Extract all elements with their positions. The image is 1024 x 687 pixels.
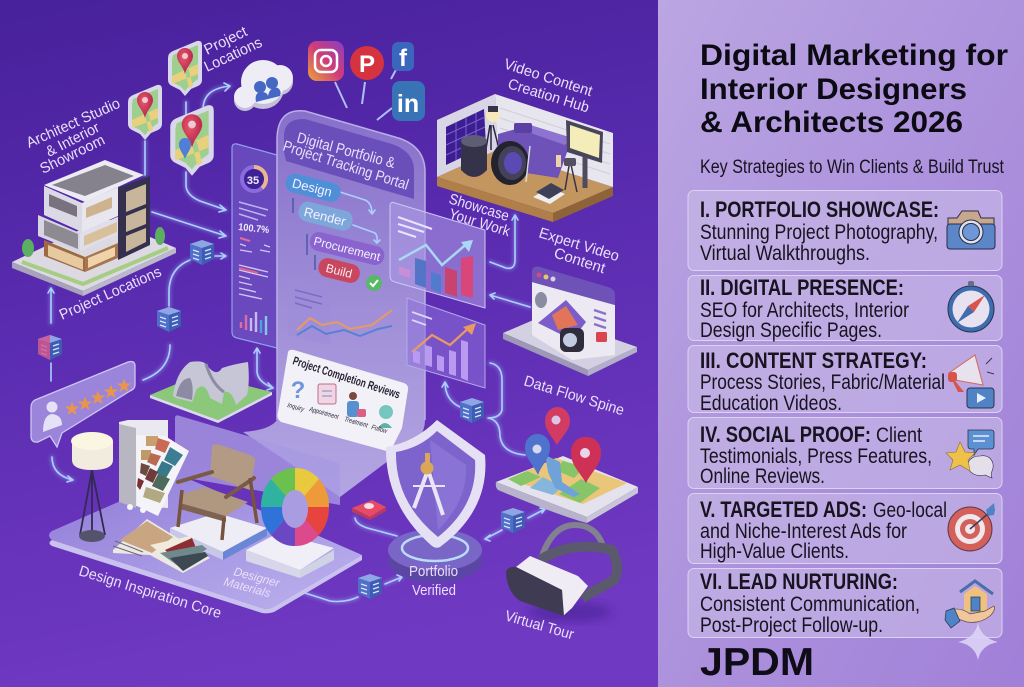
card 5: targeted ads: High-Value Clients. (700, 540, 849, 563)
icon: architect studio building (12, 160, 176, 296)
chart: donut (242, 167, 266, 191)
card 6: lead nurturing: VI. LEAD NURTURING: (700, 569, 898, 594)
icon: books (533, 183, 565, 204)
icon: sparkle (958, 623, 998, 660)
icon: star and chat bubbles (946, 430, 994, 478)
icon: material book (113, 519, 210, 573)
label: virtual tour: Virtual Tour (503, 608, 576, 643)
icon: compass tool (413, 453, 445, 515)
icon: pink pin (545, 407, 570, 445)
plinth: colour wheel (246, 533, 334, 578)
icon: blue pin on card (179, 138, 191, 159)
pill: build: Build (324, 261, 354, 281)
label: designer materials: Designer (232, 564, 282, 590)
icon: map with pins (496, 407, 638, 523)
step labels (286, 402, 388, 436)
icon: map pin cards (128, 41, 214, 176)
icon: spot light (485, 106, 500, 155)
icon: follow (378, 405, 393, 428)
step labels: Inquiry (286, 402, 305, 414)
label: project locations lower: Project Locations (57, 263, 164, 324)
label: data flow spine: Data Flow Spine (522, 373, 626, 419)
icon: pinterest: P (359, 51, 375, 78)
icon: user (43, 402, 62, 432)
icon: expert video browser (503, 267, 637, 376)
label: showcase your work: Your Work (447, 206, 512, 240)
chart panel: showcase bars (390, 202, 485, 308)
stars: ★ (89, 388, 107, 409)
label: showcase your work: Showcase (447, 191, 511, 225)
icon: check (366, 275, 382, 291)
icon: light panel (564, 120, 603, 192)
chart: donut: 35 (247, 175, 259, 187)
stars (63, 376, 133, 420)
card 5: targeted ads: Geo-local (873, 499, 947, 522)
label: project locations top: Project (201, 23, 251, 59)
card 1: portfolio showcase: Stunning Project Photography, (700, 221, 938, 244)
label: portfolio verified: Portfolio (409, 563, 458, 580)
card 1: portfolio showcase: Virtual Walkthroughs. (700, 242, 870, 265)
card 1: portfolio showcase (688, 190, 1002, 270)
card 5: targeted ads (688, 494, 1002, 564)
label: designer materials (222, 564, 282, 600)
card 3: content strategy (688, 346, 1002, 415)
stars: ★ (115, 376, 133, 397)
icon: verified shield (386, 420, 485, 599)
icon: target (948, 503, 995, 551)
card 4: social proof: Testimonials, Press Features, (700, 445, 932, 468)
label: video content hub: Video Content (502, 56, 595, 100)
card 6: lead nurturing: Consistent Communication, (700, 593, 920, 616)
card 4: social proof: Online Reviews. (700, 465, 825, 488)
card 6: lead nurturing: Post-Project Follow-up. (700, 614, 883, 637)
chart: portal lines (288, 277, 392, 345)
icon: red pin (571, 437, 601, 483)
heading: portal title: Project Tracking Portal (281, 138, 411, 194)
plinth: chair (170, 513, 267, 560)
label: architect studio: Showroom (37, 132, 108, 178)
icon: small red tile (352, 500, 386, 520)
label: video content hub: Creation Hub (506, 76, 591, 116)
brand: JPDM: JPDM (700, 641, 814, 684)
step labels: Follow (370, 424, 388, 436)
icon: floor lamp (71, 432, 113, 542)
panel: left dashboard glass (232, 144, 277, 348)
stars: ★ (76, 394, 94, 415)
panel: design inspiration core platform (49, 415, 362, 613)
icon: trees (22, 227, 165, 257)
icon: linkedin: in (397, 90, 419, 118)
icon: video content creation hub (437, 94, 613, 222)
icon: lens cylinder (461, 135, 487, 177)
card 5: targeted ads: V. TARGETED ADS: (700, 497, 867, 522)
icon: compass (948, 281, 994, 332)
card 4: social proof: Client (876, 424, 922, 447)
background: illustration panel (0, 0, 659, 687)
label: project locations top: Locations (202, 34, 265, 76)
icon: appointment (318, 384, 336, 404)
card 1: portfolio showcase: I. PORTFOLIO SHOWCASE: (700, 197, 939, 222)
card 3: content strategy: Process Stories, Fabric/Material (700, 371, 945, 394)
icon: house in hand (945, 581, 994, 628)
chart panel: lower bars (407, 298, 485, 388)
card 2: digital presence (688, 275, 1002, 342)
pill: design: Design (291, 175, 334, 200)
icon: blue pin (525, 434, 550, 475)
label: designer materials: Materials (222, 574, 272, 600)
icon: camera (491, 123, 572, 185)
icon: social media (308, 41, 425, 121)
label: portfolio verified (409, 563, 458, 599)
pill: render: Render (302, 204, 348, 229)
icon: swatch book (119, 420, 189, 516)
card 2: digital presence: Design Specific Pages. (700, 319, 882, 342)
icon: armchair (178, 444, 257, 540)
heading: review card: Project Completion Reviews (291, 354, 402, 402)
label: design inspiration core: Design Inspiration Core (77, 563, 223, 622)
step labels: Appointment (308, 406, 340, 421)
icon: instagram (308, 41, 344, 81)
chart: mini bars (241, 312, 266, 335)
card 3: content strategy: Education Videos. (700, 392, 842, 415)
label: expert video content: Content (552, 245, 608, 277)
icon: megaphone and play (948, 355, 994, 408)
label: expert video content: Expert Video (537, 225, 621, 265)
card 5: targeted ads: and Niche-Interest Ads for (700, 520, 907, 543)
heading: main title: & Architects 2026 (700, 106, 963, 139)
card 2: digital presence: II. DIGITAL PRESENCE: (700, 275, 904, 300)
icon: inquiry: ? (291, 377, 305, 404)
stat: percent: 100.7% (238, 222, 270, 236)
step labels: Treatment (343, 416, 369, 430)
panel: project completion reviews card (277, 350, 408, 452)
data-flow arrows (48, 83, 545, 602)
label: architect studio: & Interior (43, 119, 102, 161)
callout: star rating bubble (31, 362, 135, 447)
card 6: lead nurturing (688, 568, 1002, 638)
label: showcase your work (447, 191, 512, 240)
label: architect studio (24, 95, 123, 178)
icon: colour wheel (261, 468, 329, 546)
stars: ★ (63, 399, 81, 420)
card 3: content strategy: III. CONTENT STRATEGY: (700, 348, 927, 373)
data cubes (38, 240, 525, 599)
background: text panel (658, 0, 1024, 687)
card 2: digital presence: SEO for Architects, Interior (700, 299, 909, 322)
panel: digital portfolio portal (243, 111, 425, 497)
card 4: social proof: IV. SOCIAL PROOF: (700, 422, 871, 447)
pill: procurement: Procurement (312, 234, 382, 264)
heading: main title: Digital Marketing for (700, 39, 1008, 72)
icon: treatment (347, 392, 366, 417)
label: portfolio verified: Verified (412, 582, 456, 599)
label: architect studio: Architect Studio (24, 95, 123, 152)
heading: main title: Interior Designers (700, 73, 967, 106)
icon: cloud with users (234, 60, 293, 111)
icon: vr headset (506, 525, 617, 622)
icon: facebook: f (399, 45, 408, 72)
icon: architectural sculpture (150, 361, 272, 423)
heading: main title (700, 39, 1008, 139)
card 4: social proof (688, 418, 1002, 488)
workflow pills (284, 172, 386, 291)
heading: portal title: Digital Portfolio & (295, 129, 397, 172)
stars: ★ (102, 382, 120, 403)
icon: camera (947, 211, 995, 249)
